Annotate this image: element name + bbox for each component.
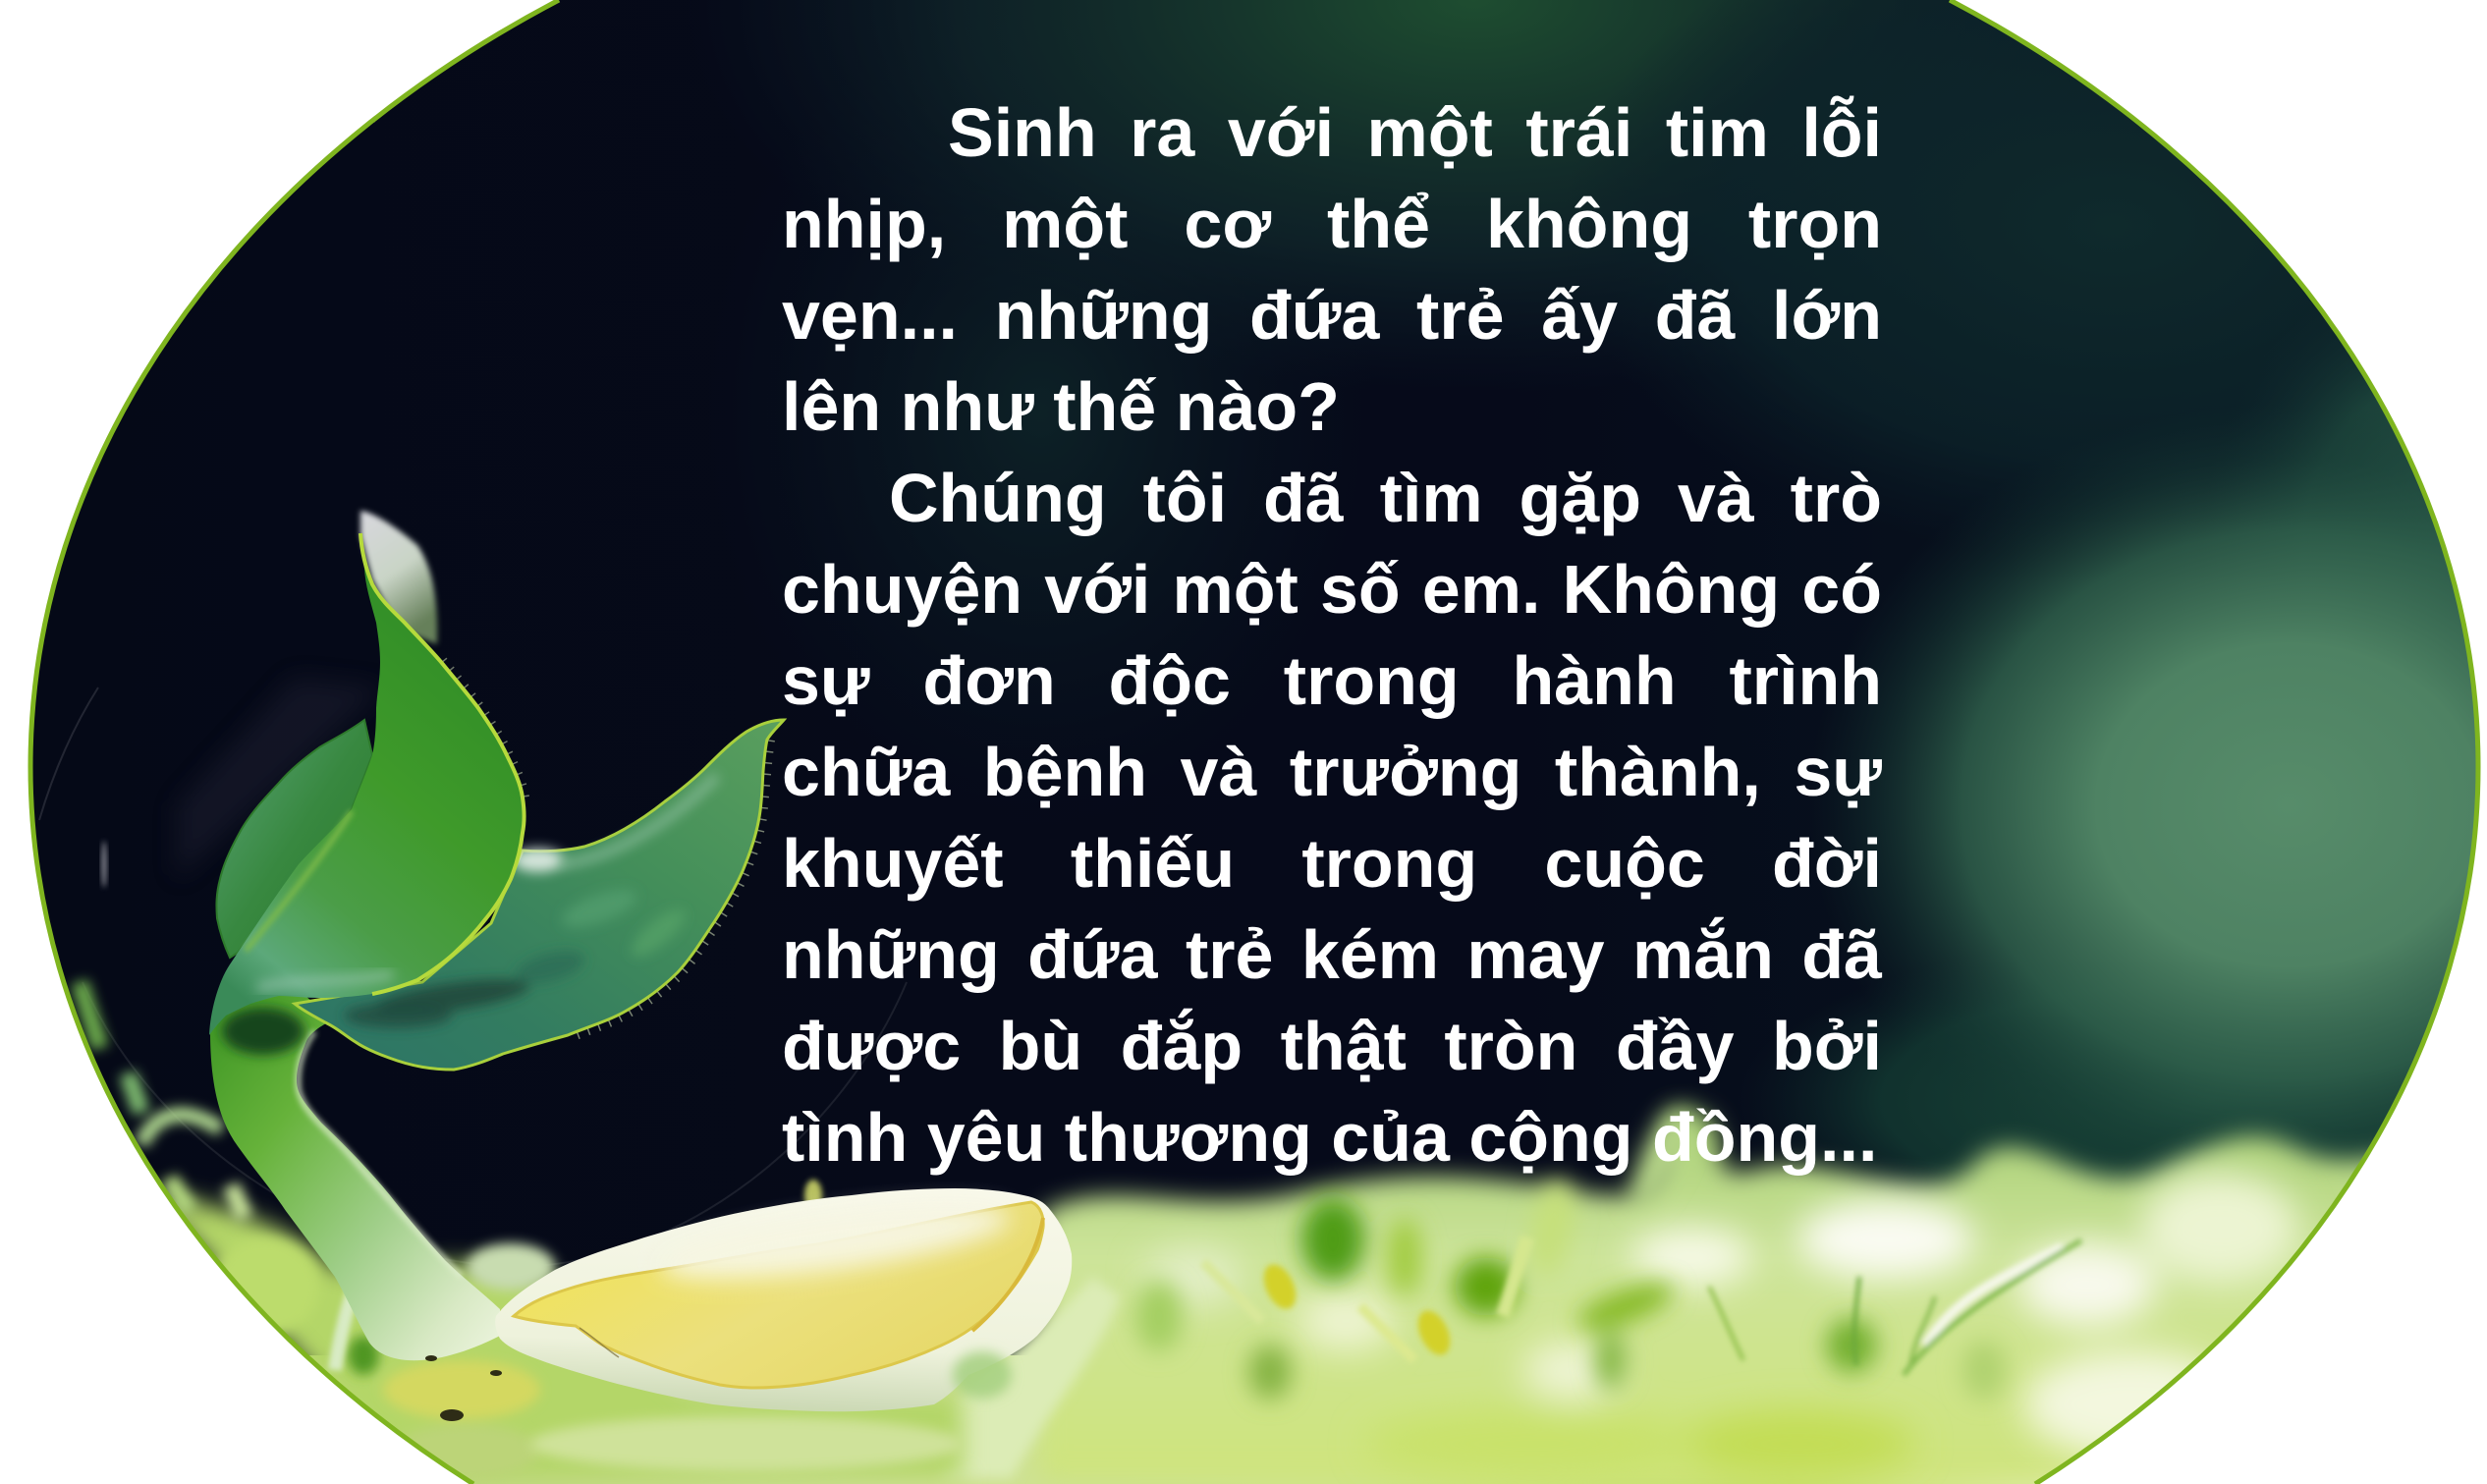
text block: intro paragraphs: được bù đắp thật tròn đầy bởi bbox=[782, 1008, 1882, 1084]
green blades in front of seed base bbox=[530, 1351, 1012, 1471]
front leaf bbox=[209, 533, 525, 1035]
right leaf bbox=[295, 720, 784, 1070]
text block: intro paragraphs: những đứa trẻ kém may mắn đã bbox=[782, 916, 1882, 993]
grass foreground: left bbox=[80, 982, 963, 1479]
seed bbox=[495, 1188, 1072, 1411]
grass foreground: right bbox=[295, 1103, 2456, 1484]
text block: intro paragraphs: sự đơn độc trong hành trình bbox=[782, 642, 1882, 719]
left lobe of front leaf bbox=[216, 720, 372, 958]
text block: intro paragraphs: Sinh ra với một trái tim lỗi bbox=[948, 94, 1882, 171]
back pale leaf tip bbox=[360, 511, 437, 644]
text block: intro paragraphs: vẹn... những đứa trẻ ấy đã lớn bbox=[782, 277, 1882, 354]
text block: intro paragraphs: lên như thế nào? bbox=[782, 368, 1340, 445]
text block: intro paragraphs: khuyết thiếu trong cuộc đời bbox=[782, 825, 1882, 902]
ground debris bbox=[425, 1355, 502, 1421]
sprout stem bbox=[210, 987, 500, 1360]
text block: intro paragraphs: Chúng tôi đã tìm gặp và trò bbox=[889, 460, 1882, 536]
text block: intro paragraphs: chữa bệnh và trưởng thành, sự bbox=[782, 734, 1882, 810]
text block: intro paragraphs: nhịp, một cơ thể không trọn bbox=[782, 186, 1882, 262]
text block: intro paragraphs: tình yêu thương của cộng đồng... bbox=[782, 1099, 1877, 1176]
decorative faint arcs and smoke bbox=[39, 678, 907, 1267]
text block: intro paragraphs: chuyện với một số em. Không có bbox=[782, 551, 1882, 628]
